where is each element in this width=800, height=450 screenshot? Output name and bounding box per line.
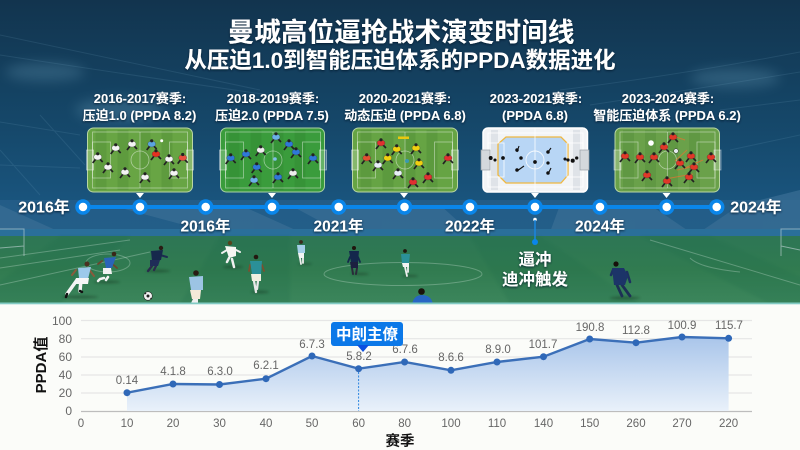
y axis labels: 0 <box>65 404 72 418</box>
y axis labels: 20 <box>59 386 72 400</box>
x axis labels: 40 <box>260 418 272 430</box>
season labels: 2023-2024赛季: <box>622 91 714 106</box>
y axis labels <box>52 314 72 418</box>
players on field <box>62 240 640 304</box>
season labels: (PPDA 6.8) <box>502 108 568 123</box>
x axis labels <box>78 418 738 430</box>
panel: pitch 2018-2019 <box>220 128 326 192</box>
x axis labels: 220 <box>719 418 738 430</box>
callout: trigger note <box>502 218 568 289</box>
value labels: 101.7 <box>529 339 557 351</box>
timeline: 2024年 <box>730 198 782 216</box>
title <box>184 18 616 73</box>
value labels: 8.9.0 <box>485 344 511 356</box>
x axis labels: 10 <box>121 418 133 430</box>
season labels: 压迫1.0 (PPDA 8.2) <box>83 108 196 123</box>
y axis title: PPDA值 <box>33 337 50 393</box>
season labels: 动态压迫 (PPDA 6.8) <box>344 108 466 123</box>
pitch grass <box>0 229 800 304</box>
x axis labels: 140 <box>534 418 553 430</box>
x axis labels: 80 <box>398 418 411 430</box>
player 1 <box>62 263 640 300</box>
y axis labels: 100 <box>52 314 72 328</box>
callout: chart marker: 中剆主僚 <box>336 324 398 344</box>
icon: football <box>144 292 152 300</box>
value labels: 112.8 <box>622 325 650 337</box>
panel: tactical board <box>481 128 589 192</box>
title: 曼城高位逼抢战术演变时间线 <box>228 18 574 48</box>
season labels: 2020-2021赛季: <box>359 91 451 106</box>
callout: trigger note: 逼冲 <box>518 250 552 269</box>
value labels <box>116 320 743 387</box>
value labels: 6.7.6 <box>392 344 418 356</box>
callout: trigger note: 迪冲触发 <box>502 269 568 289</box>
panel: pitch 2023-2024 <box>614 128 721 192</box>
x axis labels: 110 <box>488 418 506 430</box>
x axis labels: 270 <box>672 418 692 430</box>
panel: pitch 2020-2021 <box>352 128 458 192</box>
value labels: 6.3.0 <box>207 366 233 378</box>
season labels <box>83 91 741 123</box>
y axis labels: 80 <box>59 332 72 346</box>
value labels: 190.8 <box>576 322 604 334</box>
value labels: 5.8.2 <box>346 351 372 363</box>
x axis labels: 60 <box>352 418 365 430</box>
panel: pitch 2016-2017 <box>86 128 194 192</box>
timeline <box>18 193 782 236</box>
value labels: 6.7.3 <box>299 339 325 351</box>
y axis labels: 60 <box>59 350 72 364</box>
x axis labels: 50 <box>306 418 318 430</box>
season labels: 压迫2.0 (PPDA 7.5) <box>215 108 329 123</box>
value labels: 0.14 <box>116 375 139 387</box>
x axis labels: 30 <box>213 418 226 430</box>
season labels: 智能压迫体系 (PPDA 6.2) <box>593 108 741 123</box>
value labels: 115.7 <box>715 320 743 332</box>
x axis title: 赛季 <box>386 432 415 450</box>
value labels: 4.1.8 <box>160 366 186 378</box>
season labels: 2018-2019赛季: <box>227 91 319 106</box>
timeline: 2021年 <box>314 216 363 236</box>
x axis labels: 20 <box>167 418 179 430</box>
y axis labels: 40 <box>59 368 72 382</box>
x axis labels: 100 <box>441 418 461 430</box>
callout: chart marker <box>331 322 403 352</box>
panel: PPDA chart <box>0 302 800 450</box>
background: stadium <box>0 0 800 304</box>
subtitle: 从压迫1.0到智能压迫体系的PPDA数据进化 <box>184 48 616 73</box>
timeline: 2022年 <box>445 216 495 236</box>
x axis labels: 150 <box>580 418 599 430</box>
value labels: 100.9 <box>668 320 696 332</box>
timeline: 2016年 <box>18 198 70 216</box>
area and line series <box>124 334 732 411</box>
x axis labels: 0 <box>78 418 84 430</box>
value labels: 6.2.1 <box>253 360 279 372</box>
value labels: 8.6.6 <box>438 352 464 364</box>
timeline: 2016年 <box>181 216 230 236</box>
x axis labels: 260 <box>626 418 646 430</box>
season labels: 2016-2017赛季: <box>94 91 186 106</box>
season labels: 2023-2021赛季: <box>490 91 582 106</box>
timeline: 2024年 <box>575 216 625 236</box>
